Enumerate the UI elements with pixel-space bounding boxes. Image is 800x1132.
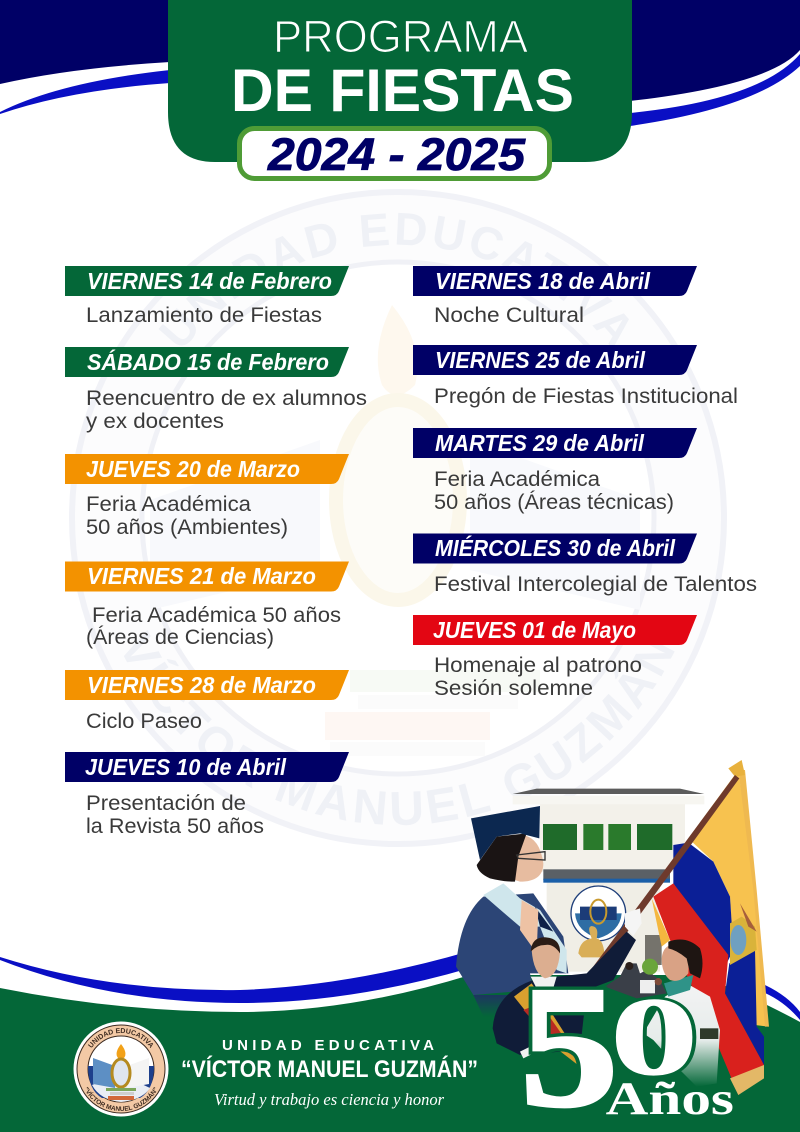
title: De Fiestas: DE FIESTAS: [231, 57, 574, 124]
event: 01 mayo: Homenaje al patrono: [434, 654, 642, 677]
event: 10 abril: [65, 752, 349, 838]
event: 10 abril: Presentación de: [86, 792, 246, 815]
event: 15 febrero: [65, 347, 367, 433]
event: 30 abril: MIÉRCOLES 30 de Abril: [435, 534, 676, 561]
event: 30 abril: [413, 534, 757, 596]
watermark: school crest: [69, 189, 727, 847]
header: blue ribbon left: [0, 70, 170, 114]
girl in uniform: [643, 939, 720, 1087]
footer: blue ribbon left: [0, 951, 470, 1003]
flag: [652, 760, 769, 1095]
header: blue ribbon right: [630, 54, 800, 126]
event: 21 marzo: (Áreas de Ciencias): [86, 626, 274, 649]
event: 10 abril: la Revista 50 años: [86, 815, 264, 838]
title panel: [168, 0, 632, 180]
event: 01 mayo: JUEVES 01 de Mayo: [433, 617, 636, 643]
event: 15 febrero: y ex docentes: [86, 410, 224, 433]
flag pole: [583, 775, 739, 983]
event: 29 abril: Feria Académica: [434, 468, 600, 491]
header: navy wave right: [630, 0, 800, 101]
event: 20 marzo: JUEVES 20 de Marzo: [86, 456, 300, 482]
event: 14 febrero: [65, 266, 349, 327]
event: 01 mayo: [413, 615, 697, 700]
event: 21 marzo: VIERNES 21 de Marzo: [87, 563, 316, 589]
year badge: 2024 - 2025: [267, 129, 526, 180]
event: 21 marzo: Feria Académica 50 años: [92, 604, 341, 627]
event: 21 marzo: [65, 562, 349, 649]
event: 10 abril: JUEVES 10 de Abril: [85, 754, 287, 780]
event: 14 febrero: Lanzamiento de Fiestas: [86, 304, 322, 327]
event: 01 mayo: Sesión solemne: [434, 677, 593, 700]
event: 30 abril: Festival Intercolegial de Talentos: [434, 573, 757, 596]
50 anniversary mark: 0: [610, 975, 698, 1099]
event: 18 abril: Noche Cultural: [434, 304, 584, 327]
footer school name: UNIDAD EDUCATIVA: [222, 1037, 434, 1054]
footer: green band: [0, 975, 800, 1132]
header: navy wave left: [0, 0, 170, 84]
footer school name: Virtud y trabajo es ciencia y honor: [214, 1090, 445, 1109]
photo montage: building, students, flag: [456, 760, 769, 1132]
event: 20 marzo: [65, 454, 349, 539]
title: Programa: PROGRAMA: [273, 11, 528, 62]
watermark: school crest: UNIDAD EDUCATIVA: [158, 213, 629, 346]
años label: Años: [606, 1073, 734, 1125]
event: 14 febrero: VIERNES 14 de Febrero: [87, 268, 332, 294]
footer school name: [181, 1037, 478, 1109]
event: 20 marzo: Feria Académica: [86, 493, 251, 516]
footer: blue ribbon right: [765, 985, 800, 1020]
50 anniversary mark: [520, 952, 734, 1132]
event: 28 marzo: Ciclo Paseo: [86, 710, 202, 733]
event: 18 abril: VIERNES 18 de Abril: [435, 268, 651, 294]
event: 25 abril: [413, 345, 738, 408]
footer logo: [74, 1022, 168, 1116]
crowd: [605, 959, 667, 998]
event: 25 abril: VIERNES 25 de Abril: [435, 347, 646, 373]
footer logo: "VÍCTOR MANUEL GUZMÁN": [86, 1086, 156, 1111]
building: [513, 789, 704, 972]
watermark: school crest: VÍCTOR MANUEL GUZMÁN: [124, 630, 674, 825]
footer logo: UNIDAD EDUCATIVA: [88, 1028, 153, 1048]
event: 20 marzo: 50 años (Ambientes): [86, 516, 288, 539]
event: 28 marzo: [65, 670, 349, 733]
event: 29 abril: MARTES 29 de Abril: [435, 430, 645, 456]
event: 15 febrero: SÁBADO 15 de Febrero: [87, 348, 329, 375]
graduate student: [456, 806, 568, 1017]
event: 25 abril: Pregón de Fiestas Institucional: [434, 385, 738, 408]
boy in uniform: [493, 908, 642, 1067]
footer school name: “VÍCTOR MANUEL GUZMÁN”: [181, 1055, 478, 1083]
event: 18 abril: [413, 266, 697, 327]
event: 29 abril: [413, 428, 697, 514]
50 anniversary mark: 0: [610, 975, 698, 1099]
event: 29 abril: 50 años (Áreas técnicas): [434, 491, 674, 514]
event: 28 marzo: VIERNES 28 de Marzo: [87, 672, 316, 698]
event: 15 febrero: Reencuentro de ex alumnos: [86, 387, 367, 410]
